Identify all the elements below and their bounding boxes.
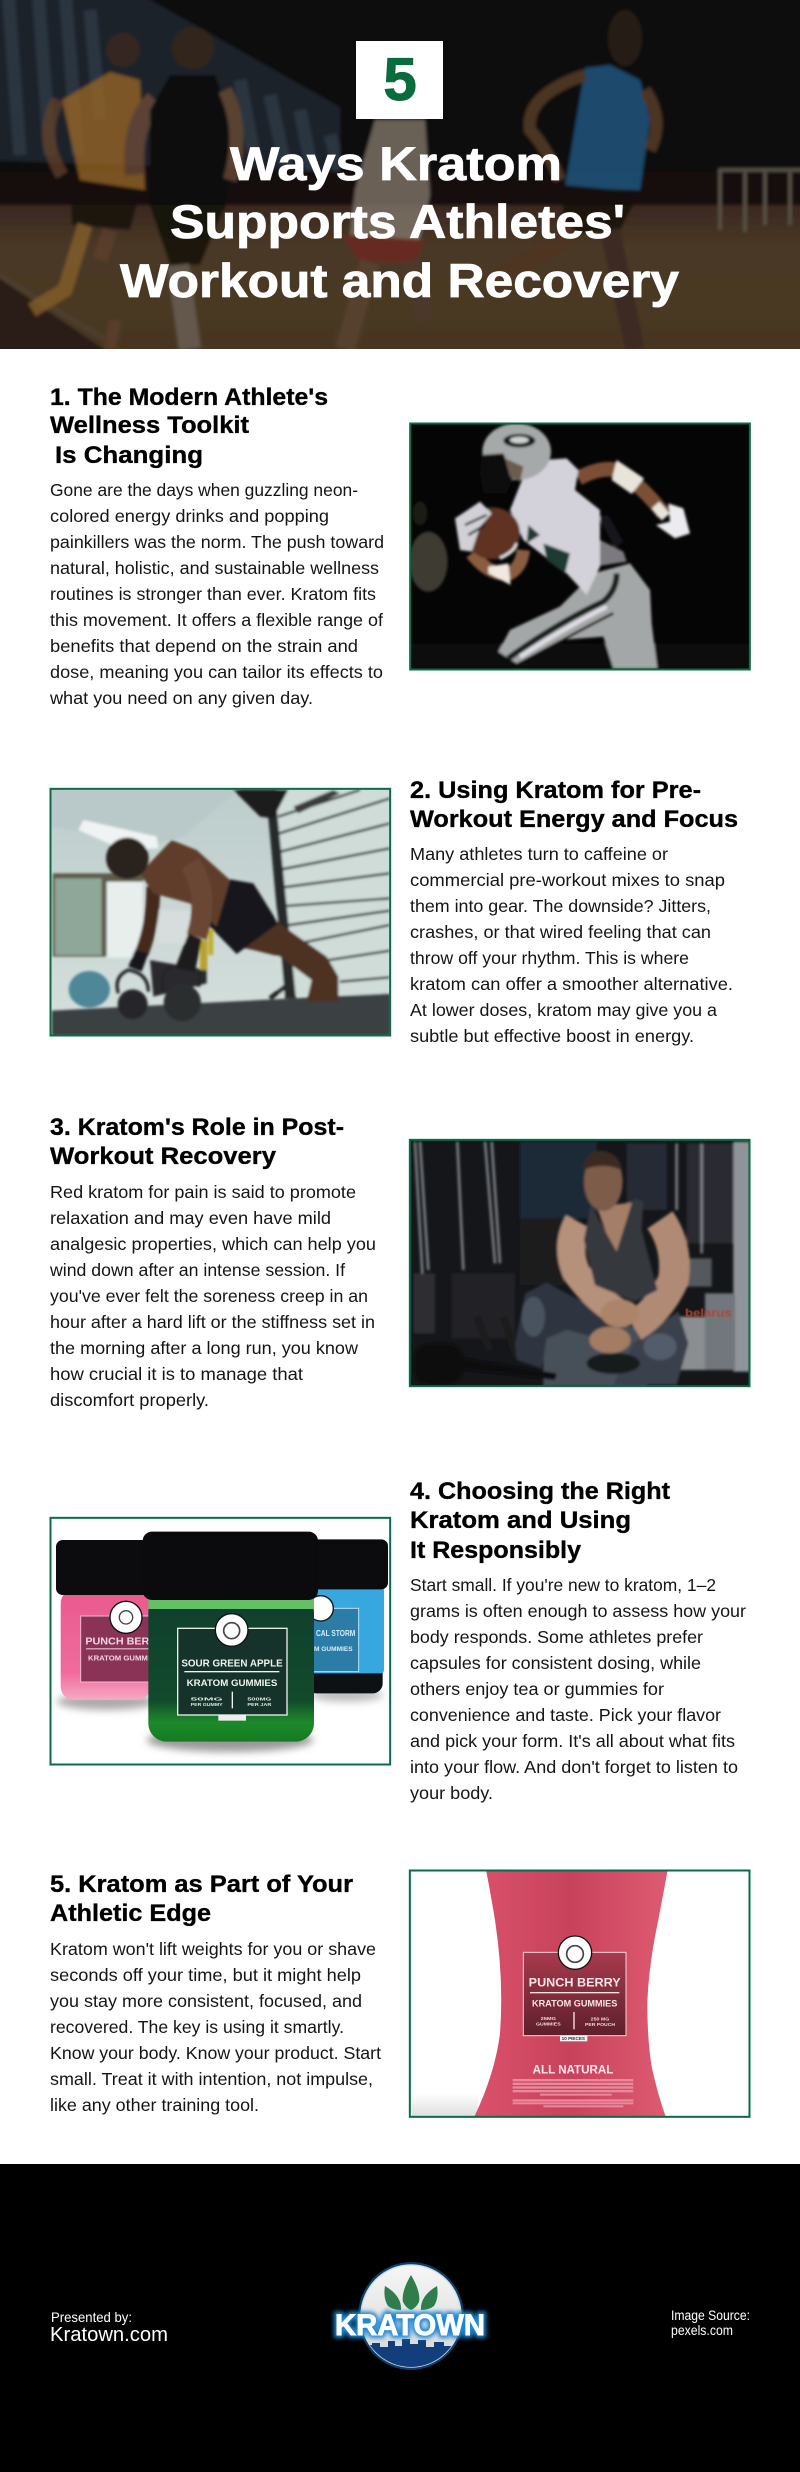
jersey bbox=[510, 458, 600, 595]
image frame bbox=[50, 789, 390, 1035]
body 1 bbox=[49, 480, 384, 708]
presented by: Kratown.com bbox=[50, 2324, 168, 2346]
heading 5: 5. Kratom as Part of Your bbox=[50, 1871, 353, 1898]
body 5: recovered. The key is using it smartly. bbox=[50, 2017, 344, 2037]
body 3: relaxation and may even have mild bbox=[50, 1208, 331, 1228]
body 3: Red kratom for pain is said to promote bbox=[50, 1182, 356, 1202]
legs bbox=[515, 1283, 617, 1368]
floor bbox=[543, 1327, 647, 1387]
logo leaves bbox=[384, 2275, 438, 2310]
body 5: you stay more consistent, focused, and bbox=[50, 1991, 362, 2011]
panel: section 4 text bbox=[410, 1478, 746, 1803]
logo wordmark: KRATOWN bbox=[335, 2309, 485, 2342]
body 4: grams is often enough to assess how your bbox=[410, 1601, 746, 1621]
image: football player running bbox=[409, 423, 750, 670]
heading 1: 1. The Modern Athlete's bbox=[50, 384, 328, 411]
body 4: and pick your form. It's all about what fits bbox=[410, 1731, 735, 1751]
green jar: 50MG bbox=[191, 1697, 223, 1703]
arms and shoulders bbox=[571, 1222, 620, 1313]
chest bbox=[596, 1200, 634, 1252]
image: punch berry gummies pouch: 250 MG bbox=[591, 2017, 609, 2023]
body 1: natural, holistic, and sustainable wellness bbox=[50, 558, 379, 578]
body 4: body responds. Some athletes prefer bbox=[410, 1627, 703, 1647]
body 1: this movement. It offers a flexible range of bbox=[50, 610, 383, 630]
panel: hero header bbox=[0, 0, 800, 380]
body 1: painkillers was the norm. The push toward bbox=[50, 532, 384, 552]
heading 2: 2. Using Kratom for Pre- bbox=[410, 777, 701, 804]
midriff and pad bbox=[595, 540, 627, 567]
number badge bbox=[356, 41, 443, 119]
body 3: analgesic properties, which can help you bbox=[50, 1234, 376, 1254]
bench/equipment bbox=[157, 910, 190, 943]
body 2: them into gear. The downside? Jitters, bbox=[410, 896, 711, 916]
panel: footer bbox=[0, 2164, 800, 2472]
kettlebells bbox=[164, 984, 201, 1021]
body 1: colored energy drinks and popping bbox=[50, 506, 329, 526]
image: punch berry gummies pouch: 10 PIECES bbox=[562, 2036, 585, 2041]
body 5: small. Treat it with intention, not impulse, bbox=[50, 2069, 373, 2089]
body 2: Many athletes turn to caffeine or bbox=[410, 844, 668, 864]
hurdles bbox=[720, 170, 800, 232]
heading 4: Kratom and Using bbox=[410, 1507, 631, 1534]
runner right, blue tank bbox=[608, 10, 642, 66]
front arm bbox=[472, 550, 523, 574]
logo skyline bbox=[360, 2339, 462, 2368]
heading 3: Workout Recovery bbox=[50, 1143, 277, 1170]
title: Ways Kratom bbox=[230, 137, 562, 190]
pouch label bbox=[523, 1952, 626, 2036]
pants bbox=[498, 563, 657, 668]
green jar: 500MG bbox=[247, 1697, 271, 1703]
body 4: into your flow. And don't forget to listen to bbox=[410, 1757, 738, 1777]
tank top bbox=[584, 1198, 657, 1302]
body 3: the morning after a long run, you know bbox=[50, 1338, 358, 1358]
image: punch berry gummies pouch: ALL NATURAL bbox=[533, 2062, 613, 2076]
body 1: dose, meaning you can tailor its effects to bbox=[50, 662, 383, 682]
green jar: PER JAR bbox=[247, 1702, 272, 1708]
ball bbox=[465, 507, 520, 559]
image: punch berry gummies pouch: 25MG bbox=[541, 2016, 556, 2022]
body 4: Start small. If you're new to kratom, 1–2 bbox=[410, 1575, 716, 1595]
body 5 bbox=[50, 1939, 381, 2115]
body 4: your body. bbox=[410, 1783, 493, 1803]
window bbox=[53, 873, 143, 957]
pink jar bbox=[56, 1540, 151, 1700]
blue jar bbox=[307, 1539, 388, 1693]
heading 4 bbox=[410, 1478, 670, 1564]
image: punch berry gummies pouch: KRATOM GUMMIES bbox=[532, 1999, 617, 2009]
image: punch berry gummies pouch: PER POUCH bbox=[585, 2022, 615, 2028]
runner center, white shirt bbox=[350, 120, 430, 240]
title bbox=[120, 137, 679, 307]
green jar: PER GUMMY bbox=[191, 1702, 223, 1708]
panel: section 3 text bbox=[49, 1114, 376, 1410]
body 2: At lower doses, kratom may give you a bbox=[410, 1000, 717, 1020]
body 1: benefits that depend on the strain and bbox=[50, 636, 358, 656]
head bbox=[106, 838, 149, 879]
image frame bbox=[410, 1870, 749, 2117]
image: punch berry gummies pouch: GUMMIES bbox=[536, 2021, 561, 2027]
body 4: convenience and taste. Pick your flavor bbox=[410, 1705, 721, 1725]
image source credit: Image Source: bbox=[671, 2308, 750, 2323]
green jar: KRATOM GUMMIES bbox=[187, 1678, 277, 1688]
body 3: hour after a hard lift or the stiffness set in bbox=[50, 1312, 375, 1332]
body 1: Gone are the days when guzzling neon- bbox=[50, 480, 358, 500]
head bbox=[582, 1164, 624, 1212]
image: muscular man seated in a gym bbox=[409, 1139, 750, 1387]
image: punch berry gummies pouch: PUNCH BERRY bbox=[529, 1976, 621, 1990]
body 3: wind down after an intense session. If bbox=[49, 1260, 345, 1280]
body 2: commercial pre-workout mixes to snap bbox=[410, 870, 725, 890]
heading 3: 3. Kratom's Role in Post- bbox=[50, 1114, 344, 1141]
body 4 bbox=[410, 1575, 746, 1803]
heading 4: It Responsibly bbox=[410, 1537, 582, 1564]
image: three jars of kratom gummies bbox=[50, 1517, 391, 1765]
body 4: capsules for consistent dosing, while bbox=[410, 1653, 701, 1673]
glove bbox=[455, 502, 492, 552]
front arm bbox=[190, 863, 202, 937]
body 5: Know your body. Know your product. Start bbox=[50, 2043, 381, 2063]
title: Supports Athletes' bbox=[170, 195, 625, 248]
body 1: what you need on any given day. bbox=[49, 688, 313, 708]
body 2 bbox=[410, 844, 733, 1046]
runner left, orange shirt bbox=[106, 33, 140, 67]
image source credit: pexels.com bbox=[671, 2323, 733, 2338]
heading 1: Wellness Toolkit bbox=[50, 412, 249, 439]
green jar: SOUR GREEN APPLE bbox=[181, 1658, 283, 1669]
shorts bbox=[208, 879, 278, 954]
heading 1: Is Changing bbox=[55, 442, 203, 469]
image source credit bbox=[671, 2308, 750, 2338]
image: punch berry gummies pouch bbox=[409, 1870, 750, 2117]
presented by: Presented by: bbox=[51, 2309, 132, 2325]
image: man doing push-ups on kettlebells bbox=[50, 788, 391, 1036]
heading 3 bbox=[50, 1114, 344, 1170]
heading 5: Athletic Edge bbox=[50, 1900, 211, 1927]
helmet bbox=[482, 423, 551, 480]
logo wordmark: KRATOWN bbox=[335, 2309, 485, 2342]
hands bbox=[601, 1299, 639, 1327]
panel: section 2 text bbox=[410, 777, 738, 1046]
heading 2 bbox=[410, 777, 738, 833]
panel: section 1 text bbox=[49, 384, 384, 708]
photo: runners on a track bbox=[0, 0, 800, 380]
heading 4: 4. Choosing the Right bbox=[410, 1478, 670, 1505]
image frame bbox=[410, 1140, 749, 1386]
body 3 bbox=[49, 1182, 376, 1410]
right wall bbox=[277, 788, 391, 995]
panel: section 5 text bbox=[50, 1871, 381, 2115]
logo: Kratown bbox=[335, 2262, 485, 2370]
photo wall text: belarus bbox=[685, 1308, 732, 1320]
equipment bottom left bbox=[477, 1317, 517, 1357]
back arm bbox=[578, 469, 663, 513]
green jar bbox=[143, 1532, 318, 1742]
image frame bbox=[50, 1518, 390, 1764]
back arm bbox=[142, 887, 153, 953]
blue jar: CAL STORM bbox=[316, 1629, 356, 1638]
pouch body bbox=[474, 1870, 668, 2117]
number badge: 5 bbox=[383, 46, 417, 113]
body 1: routines is stronger than ever. Kratom fits bbox=[50, 584, 376, 604]
body 2: throw off your rhythm. This is where bbox=[410, 948, 689, 968]
presented by bbox=[50, 2309, 168, 2346]
legs bbox=[237, 922, 338, 1002]
body 5: seconds off your time, but it might help bbox=[50, 1965, 361, 1985]
heading 2: Workout Energy and Focus bbox=[410, 806, 738, 833]
pink jar: PUNCH BER bbox=[85, 1636, 149, 1647]
floor bbox=[52, 993, 391, 1036]
body 5: Kratom won't lift weights for you or shave bbox=[50, 1939, 376, 1959]
body 3: discomfort properly. bbox=[50, 1390, 209, 1410]
body 3: how crucial it is to manage that bbox=[50, 1364, 303, 1384]
runner second, black tank bbox=[172, 27, 214, 69]
heading 5 bbox=[50, 1871, 353, 1927]
body 3: you've ever felt the soreness creep in an bbox=[50, 1286, 368, 1306]
ball bbox=[69, 971, 110, 1008]
body 2: subtle but effective boost in energy. bbox=[410, 1026, 694, 1046]
body 5: like any other training tool. bbox=[50, 2095, 259, 2115]
body 2: kratom can offer a smoother alternative. bbox=[410, 974, 733, 994]
body 4: others enjoy tea or gummies for bbox=[410, 1679, 664, 1699]
blue jar: M GUMMIES bbox=[314, 1646, 353, 1653]
pink jar: KRATOM GUMMI bbox=[88, 1654, 150, 1663]
image frame bbox=[410, 423, 750, 669]
title: Workout and Recovery bbox=[120, 254, 679, 307]
body 2: crashes, or that wired feeling that can bbox=[410, 922, 711, 942]
heading 1 bbox=[50, 384, 328, 469]
torso bbox=[140, 840, 230, 927]
